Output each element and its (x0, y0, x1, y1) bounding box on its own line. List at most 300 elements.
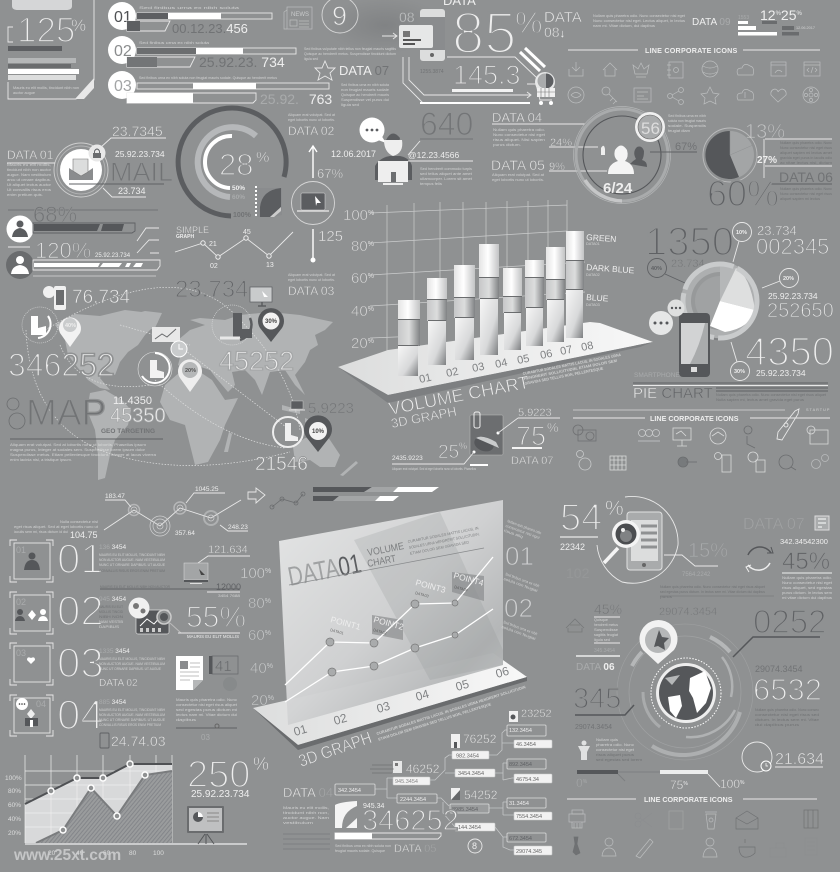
value: 250 (187, 754, 250, 796)
heading: DATA 07 (339, 63, 389, 78)
copy (593, 14, 686, 28)
percentages: 1553 (738, 15, 749, 21)
y labels: 100% (5, 775, 22, 782)
gears bubble (128, 598, 150, 618)
value 13%: 13% (745, 121, 785, 143)
icon: bubble and screen (16, 698, 38, 727)
value (560, 497, 624, 539)
copy: mi vitae dictum dui dapibus (782, 596, 832, 600)
copy (99, 699, 165, 727)
subtitle: CHART (366, 554, 397, 570)
copy (594, 618, 619, 642)
copy: NIBH NON (99, 615, 123, 619)
boxes white (393, 740, 552, 855)
value: 29074.3454 (575, 724, 612, 731)
panel: world map (7, 276, 358, 480)
value 5.9223: 5.9223 (518, 407, 552, 419)
title 3D graph: 3D GRAPH (296, 728, 374, 771)
value 27%: 27% (757, 155, 777, 166)
title: 3D GRAPH (390, 404, 458, 431)
copy: NON AUCTOR AUGUE. NAM VESTIBULUM (99, 558, 165, 562)
big value: 346252 (362, 805, 459, 837)
rules (283, 834, 330, 849)
x labels: 100 (153, 850, 164, 857)
y-axis labels: 60 (351, 270, 368, 287)
y-axis labels: 20 (351, 335, 368, 352)
bubble (360, 118, 386, 143)
title: PIE CHART (633, 385, 713, 402)
grid (370, 200, 585, 355)
badge 10% (732, 222, 752, 262)
contact value: @12.23.4566 (408, 150, 459, 160)
seal (223, 677, 237, 691)
copy: MAURIS EU ELIT MOLLIS, TINCIDUNT NIBH (99, 708, 165, 712)
y-axis labels: 100 (343, 207, 368, 224)
panel: data 07 star (304, 47, 396, 107)
date: 12.06.2017 (331, 149, 376, 159)
line (175, 232, 293, 257)
y labels: % (265, 568, 271, 575)
copy 2: eget lobortis nunc ut lobortis. (288, 278, 335, 282)
copy: sagittis feugiat (594, 633, 619, 637)
value 67% (650, 141, 697, 153)
icon: team search (573, 425, 596, 441)
frame lines (403, 57, 537, 103)
labels (105, 486, 248, 537)
frame (8, 0, 94, 99)
subtitle: VOLUME (366, 541, 405, 559)
number 8 badge (468, 839, 482, 853)
copy: Nullam quis pharetra odio. Nunc consec (755, 708, 819, 712)
value 11.4350: 11.4350 (113, 395, 152, 407)
x-axis labels: 07 (559, 344, 574, 358)
values top: 23.734 (757, 223, 797, 238)
copy (283, 806, 329, 825)
leader (575, 705, 634, 715)
circle (742, 742, 772, 772)
value 120%: 25.92.23.734 (95, 253, 131, 259)
copy: eget lobortis nunc ut lobortis. (288, 118, 335, 122)
icon: star (701, 87, 719, 104)
caption: ETIAM DOLOR SEM GRAVIDA SED TELLUS NON, PELLENTESQUE (378, 702, 492, 742)
icons row 1 (569, 810, 818, 829)
track (618, 771, 660, 773)
copy: ligula sed (304, 57, 318, 61)
rings (574, 106, 670, 204)
icon: code folder (804, 62, 820, 76)
icon: scissors (635, 813, 652, 827)
label: 01 (16, 545, 26, 555)
copy: sodale. Suspendis (668, 124, 706, 128)
rules (633, 382, 828, 384)
panel: line graph top centre (14, 486, 305, 540)
side note 02: Sed finibus urna ex nibh (503, 620, 538, 636)
icon: handshake (710, 428, 726, 444)
pin 40% (59, 317, 81, 347)
box labels: 46.3454 (516, 742, 536, 748)
value 24%: 24% (550, 137, 572, 149)
markers (326, 600, 458, 676)
subtitle (366, 541, 405, 570)
icon: cycle (746, 547, 773, 572)
centre copy: purus (660, 595, 672, 599)
icon: presentation (673, 428, 691, 446)
y labels (5, 775, 22, 837)
icons row 2 (573, 837, 817, 858)
number 08: 08 (399, 9, 415, 25)
rules (764, 139, 832, 178)
badge 40% (648, 258, 685, 283)
heading: LINE CORPORATE ICONS (644, 795, 733, 804)
copy: 1335 3454 (99, 648, 130, 655)
step 01: 00.12.23.456 (172, 21, 248, 36)
copy: ac vitae lectus nisl, dictum (780, 161, 832, 165)
icon: pie target (678, 457, 697, 467)
panel: simple graph (175, 225, 293, 270)
centre copy: sed egestas purus dictum. In lectus sem mi. Vitae dictum dui dapibus (660, 590, 765, 594)
value 76.734: 76.734 (72, 287, 131, 308)
copy: Nunc consectetur nisl eget. Lectus aliquet, in lectus (593, 19, 685, 23)
date: 25.92.23.734 (191, 789, 250, 800)
panel: 125% stats (8, 0, 94, 99)
caption (407, 526, 481, 556)
copy: dictum. In lectus sem mi. Vitae (755, 718, 819, 722)
icon: search trend (779, 455, 796, 470)
value 120% (35, 238, 131, 263)
icon: share (668, 88, 684, 104)
panel: 85% shopping (382, 0, 582, 105)
copy: Nulla consectetur nisl (60, 520, 98, 524)
x labels: 06 (494, 664, 511, 681)
legend: DARK BLUE (586, 262, 635, 275)
star pin (640, 620, 678, 664)
panel: volume chart (338, 200, 653, 431)
rule (8, 209, 158, 211)
value 25% (438, 441, 467, 463)
value 75% (516, 420, 559, 451)
x labels: 05 (454, 677, 471, 694)
icon: heart (771, 89, 786, 102)
label: SMARTPHONE (634, 372, 680, 379)
step 01: 01 (114, 9, 132, 26)
copy: nam mi. Vitae dictum, dui dapibus (593, 24, 655, 28)
label: 02 (16, 597, 26, 607)
value 25%: % (459, 441, 467, 451)
badge 20%: 20% (783, 276, 794, 282)
value: 21.634 (775, 751, 824, 768)
icon: document (470, 412, 503, 455)
magnifier (157, 610, 181, 633)
copy: Aliquam erat volutpat. Sed at (288, 113, 336, 117)
star icon (315, 61, 335, 80)
value: 54 (560, 497, 602, 539)
value: 345.3454 (594, 648, 615, 654)
box labels: 982.3454 (456, 754, 479, 760)
copy: arcu ut ornare dapibus. (7, 178, 51, 182)
icon: worker (602, 838, 616, 856)
data 05: 9% (549, 161, 565, 173)
panel: numbered progress list (108, 2, 332, 107)
rule (8, 246, 30, 248)
panel: user with monitor (331, 106, 473, 186)
pin 20% (178, 359, 202, 392)
step 01 (108, 2, 272, 36)
icon: mobile hand (714, 452, 731, 472)
copy: hendrerit metus (594, 623, 618, 627)
copy (99, 596, 127, 629)
column 02 (427, 278, 447, 365)
step 03 (108, 71, 332, 107)
y-axis labels: 40 (351, 303, 368, 320)
caption: SODALES URNA HENDRERIT SOLLICITUDIN. (409, 532, 480, 550)
labels: 21 (209, 241, 217, 248)
caption: ETIAM DOLOR SEM GRAVIDA SED (410, 540, 470, 556)
value top: 29074.3454 (659, 606, 717, 618)
icon: envelope (736, 811, 758, 829)
leader (733, 637, 820, 657)
copy (420, 167, 473, 186)
rule (560, 536, 598, 538)
value 21546: 21546 (255, 454, 308, 475)
caption: HENDRERIT SOLLICITUDIN. ETIAM DOLOR SEM (523, 359, 617, 381)
copy: MAURIS EU ELIT (99, 605, 124, 609)
copy (780, 141, 833, 165)
data 04: purus dictum. (493, 143, 521, 147)
copy 2: Nullam quis pharetra odio. Nunc (780, 187, 832, 191)
pie (703, 128, 757, 182)
bracket (10, 540, 53, 582)
rule white (576, 655, 620, 657)
copy: sed egestas sed lorem (596, 758, 642, 762)
bars (398, 231, 584, 376)
value: % (605, 497, 624, 520)
hatched area (36, 771, 172, 843)
caption: CURABITUR SODALES MATTIS LACUS, IN SODALES URNA (522, 353, 622, 376)
number 9 badge: 9 (332, 1, 347, 31)
copy: Nulla sapien mi, lectus amet gravida eget purus (716, 398, 804, 402)
value 68%: 68% (33, 202, 77, 227)
box labels: 46754.34 (516, 777, 539, 783)
labels: 0 (576, 776, 583, 790)
bar dark (33, 223, 135, 233)
value 6532: 6532 (753, 672, 822, 707)
panel: flow diagram (335, 708, 552, 855)
step 02 (10, 587, 127, 634)
value 46252 (393, 761, 440, 776)
copy: Mauris eu elit mollis, (7, 163, 51, 167)
step 02: 02 (114, 43, 132, 60)
side label: 08↓ (544, 24, 565, 40)
labels: % (683, 781, 688, 787)
column 07 (546, 247, 565, 342)
side note 01: consectetur nisi eget (505, 524, 541, 540)
panel: 250% (187, 754, 269, 844)
icon: browser (771, 62, 786, 76)
value 2435.9223: 2435.9223 (392, 455, 423, 462)
icon: lock badge (88, 144, 106, 162)
side note 01: Sed finibus urna ex nibh (505, 572, 540, 588)
series 2 (285, 609, 493, 702)
bars (738, 21, 815, 36)
copy (782, 576, 833, 600)
person (375, 133, 412, 185)
panel: 3D graph (240, 500, 543, 771)
labels: % (740, 780, 745, 786)
y labels: 80% (8, 788, 21, 795)
clock small (171, 341, 187, 357)
value 23.734: 23.734 (175, 276, 248, 303)
column 03 (454, 265, 475, 360)
copy 2: Nunc consectetur nisl eget risus (780, 192, 832, 196)
rule (100, 588, 240, 590)
credit card (399, 25, 433, 48)
data 04: Nullam quis pharetra odio. (493, 128, 545, 132)
inner arc (205, 136, 232, 188)
value 23.7345: 23.7345 (112, 123, 163, 139)
rule (178, 632, 240, 634)
copy: Quisque ac hendrerit mauris (341, 93, 389, 97)
panel: 28% donut (178, 108, 286, 219)
icon: tie (573, 837, 580, 855)
step 02: 25.92.23. 734 (199, 54, 285, 70)
badge 30%: 30% (734, 369, 745, 375)
x labels: 20 (48, 850, 56, 857)
point labels: POINT4 (452, 570, 485, 588)
icons row (573, 425, 828, 448)
percentages: % (776, 11, 782, 17)
value 5.9223: 5.9223 (308, 400, 354, 417)
rule (782, 572, 832, 574)
number 9 badge (322, 0, 358, 33)
x labels: 01 (292, 722, 309, 739)
line (104, 500, 241, 530)
outlined box labels (338, 728, 532, 842)
bracket (10, 592, 53, 634)
copy: soluta non feugiat mauris (668, 119, 706, 123)
small number: 1255.3874 (420, 69, 444, 75)
y-axis labels: % (368, 241, 374, 248)
caption (335, 844, 391, 853)
icon: laptop (292, 182, 334, 224)
box labels: 144.3454 (458, 825, 481, 831)
icon: monitor people (807, 426, 828, 444)
legend: GREEN (586, 232, 617, 244)
number: 03 (57, 639, 104, 686)
copy: CONVALLIS RISUS EROS ENIM PRETIUM (99, 723, 161, 727)
label: 03 (16, 648, 26, 658)
point labels: POINT3 (414, 577, 447, 595)
labels: 100 (720, 777, 740, 791)
labels: 248.23 (228, 524, 248, 531)
outer rings (617, 624, 753, 760)
x-axis labels (418, 340, 595, 386)
value 15%: 15% (688, 540, 728, 562)
badge 40%: 40% (651, 266, 662, 272)
value 45350: 45350 (110, 405, 166, 427)
y-axis labels: % (368, 306, 374, 313)
underline (452, 89, 513, 92)
box labels: 7554.3454 (516, 814, 542, 820)
heading: SIMPLE (176, 225, 209, 235)
labels: 1045.25 (195, 486, 219, 493)
step 03 (10, 639, 165, 689)
copy: risus aliquet purus (596, 753, 634, 757)
copy: Aliquam erat volutpat. Sed at lobortis nunc ut lobortis. Phasellus ipsum (10, 443, 146, 447)
side note 01: Nullam quis pharetra odio (507, 519, 542, 535)
pie (681, 262, 759, 340)
number 8 badge: 8 (472, 841, 477, 851)
rule (420, 138, 473, 140)
panel: 85% shopping: % (515, 5, 543, 40)
value 25%: 25 (438, 442, 459, 463)
x labels: 40 (76, 850, 84, 857)
badge 20% (762, 268, 798, 288)
point labels: DATA04 (454, 585, 468, 593)
copy: consectetur nisi eget risus aliquet (176, 703, 238, 707)
y-axis labels: 80 (351, 238, 368, 255)
percentages: 12 (760, 7, 776, 23)
heading data 06: DATA 06 (779, 169, 833, 185)
number: 02 (57, 587, 104, 634)
icon: refresh globe (702, 61, 718, 77)
pin 30%: 30% (265, 319, 278, 325)
x labels: 02 (332, 711, 349, 728)
y labels: 20% (8, 830, 21, 837)
subtitle: GEO TARGETING (101, 428, 155, 435)
icon: crown (633, 63, 649, 77)
side note 02: soluta non feugiat (501, 625, 537, 641)
underline (512, 447, 542, 449)
step 02: Sed finibus urna ex nibh soluta (139, 41, 210, 45)
labels (576, 776, 745, 792)
series 1 (285, 557, 493, 685)
icon: gears (812, 454, 828, 468)
caption (13, 86, 79, 95)
y-axis labels (343, 207, 374, 352)
icon: tablet (669, 811, 683, 829)
copy: auctor augue. Nam (283, 816, 329, 820)
markers (201, 236, 271, 259)
title MAP: MAP (26, 392, 106, 433)
heading: LINE CORPORATE ICONS (650, 414, 739, 423)
panel: 125% stats: % (71, 16, 86, 35)
value 23252: 23252 (521, 708, 552, 720)
icon: group (638, 430, 660, 441)
legend: BLUE (586, 292, 609, 304)
copy: Mauris quis pharetra odio. Nunc (176, 698, 237, 702)
copy: Ut aliquet lectus auctor (7, 183, 52, 187)
page curl (256, 186, 282, 217)
copy: Aliquam erat volutpat. Sed at eget lobortis nunc ut lobortis. Phasellus (392, 467, 476, 471)
heading: DATA 01 (7, 148, 54, 162)
copy: magna purus, Integer at sodales sem. Suspendisse lorem ipsum dolor (10, 448, 146, 452)
y-axis labels: % (368, 210, 374, 217)
caption: Sed finibus urna ex nibh soluta non (335, 844, 391, 848)
panel: numbered steps (10, 535, 166, 749)
copy: NUNC UT ORNARE DAPIBUS. UT AUGUE (99, 563, 165, 567)
labels: 02 (210, 263, 218, 270)
values right: 252650 (767, 300, 834, 322)
panel: team ring (491, 106, 706, 204)
outlined box labels: 8985.3454 (452, 807, 478, 813)
copy: augue. Nam vestibulum (7, 173, 51, 177)
big number 640: 640 (420, 106, 473, 142)
small value: 7564.2242 (682, 572, 711, 578)
copy: MOLLIS TINCID (99, 610, 123, 614)
icons row 1 (569, 61, 820, 78)
x-axis (25, 843, 247, 845)
point labels: DATA02 (373, 628, 387, 636)
